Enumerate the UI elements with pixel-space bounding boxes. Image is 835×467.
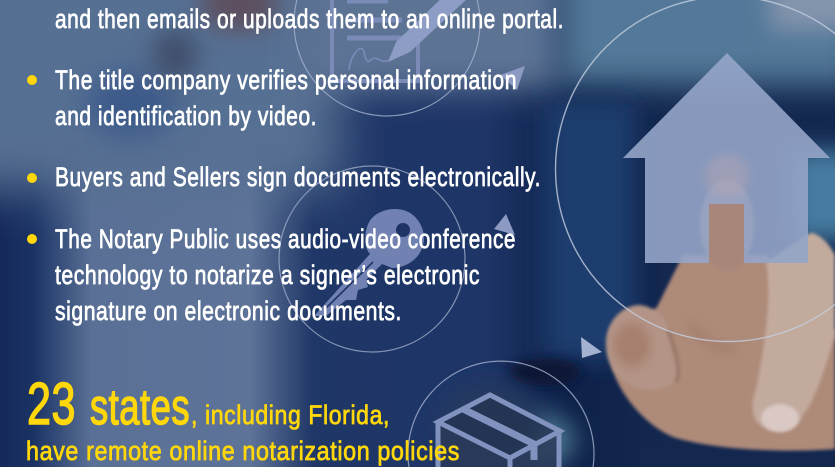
icon: box in circle: [408, 361, 594, 467]
callout: 23 states: , including Florida,: [191, 400, 390, 430]
bullet: notary: [27, 224, 516, 326]
bullet: notary: technology to notarize a signer’s electronic: [55, 260, 480, 290]
arrow: small triangle middle: [494, 214, 515, 235]
hand pointing at the house: [606, 179, 835, 451]
bullet: notary: signature on electronic documents.: [55, 296, 402, 326]
icon: key in circle: [279, 166, 465, 352]
callout: 23 states: states: [90, 379, 190, 435]
callout: 23 states: [27, 382, 459, 466]
bullet: signing: Buyers and Sellers sign documents electronically.: [55, 162, 541, 192]
callout: 23 states: 23: [27, 371, 76, 437]
list line: and then emails or uploads them to an online portal.: [55, 4, 564, 34]
bullet: verification: [27, 65, 517, 131]
arrow: small triangle top: [500, 66, 525, 90]
callout: 23 states: have remote online notarization policies: [26, 436, 460, 466]
icon: house: [623, 53, 830, 263]
arrow: small triangle lower: [581, 337, 602, 358]
bullet: verification: and identification by video.: [55, 101, 317, 131]
icon: large circle around house: [556, 0, 835, 342]
bullet: verification: The title company verifies personal information: [55, 65, 517, 95]
bullet: signing: [27, 166, 539, 192]
icon: signed document in circle: [294, 0, 480, 116]
bullet: notary: The Notary Public uses audio-video conference: [55, 224, 516, 254]
bullet list: [27, 4, 564, 326]
